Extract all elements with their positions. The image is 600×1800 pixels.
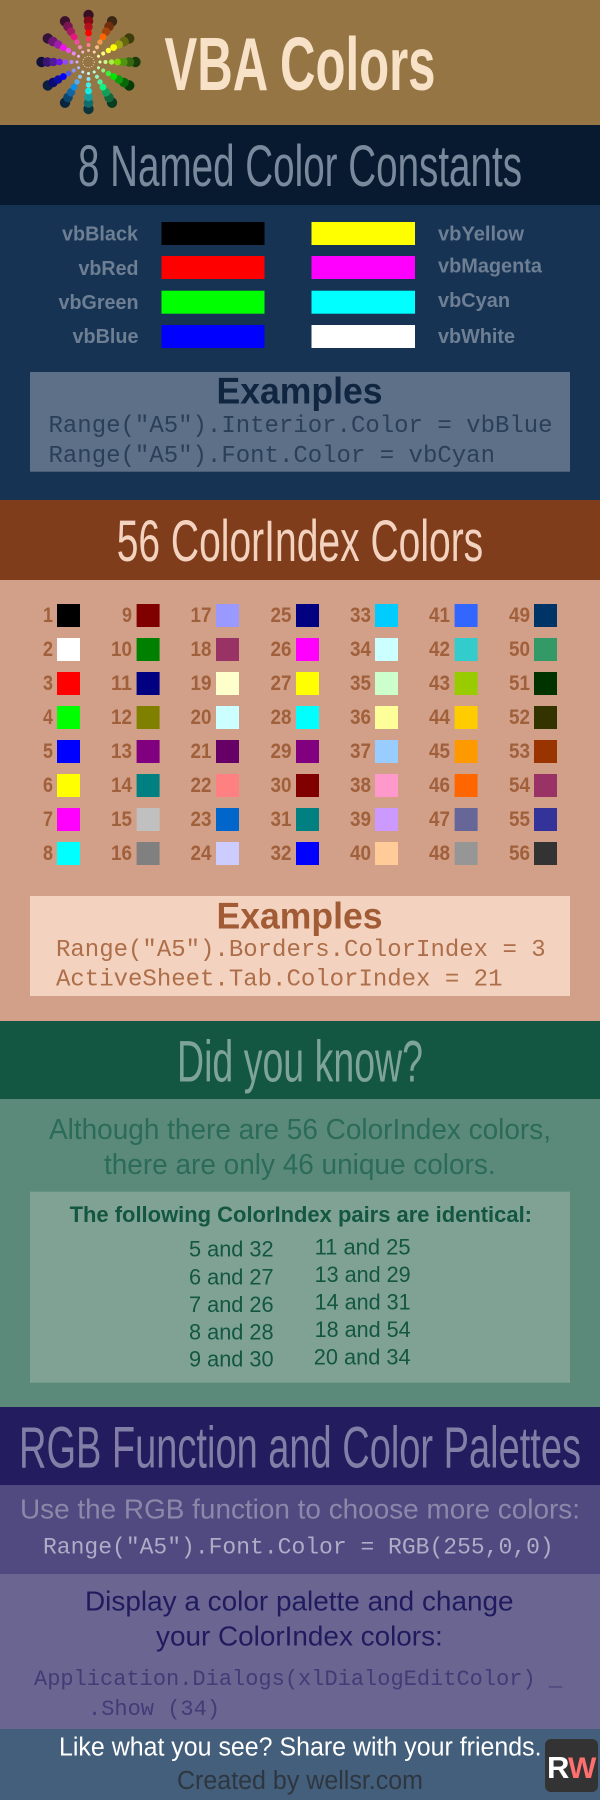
color grid column 6: 43: [429, 672, 450, 695]
color grid column 4: 32: [270, 842, 292, 865]
panel: ColorIndex colors: [0, 500, 600, 1021]
callout: identical pairs: [30, 1192, 570, 1383]
text: unique colors note: there are only 46 unique colors.: [104, 1149, 496, 1181]
right color constants: vbWhite: [438, 326, 515, 348]
color grid column 2: 16: [111, 842, 132, 865]
color grid column 7: 50: [509, 638, 530, 661]
right color constants: vbYellow: [438, 224, 524, 246]
color grid column 1: 3: [43, 672, 53, 695]
callout: identical pairs: 7 and 26: [189, 1292, 274, 1317]
text: color palette: Application.Dialogs(xlDialogEditColor) _: [34, 1667, 563, 1692]
left color constants: vbGreen: [58, 292, 138, 314]
icon: RW logo: R: [547, 1750, 569, 1785]
color grid column 7: 53: [509, 740, 530, 763]
color grid column 5: 34: [350, 638, 371, 661]
callout: examples: [30, 896, 570, 996]
color grid column 2: 10: [111, 638, 132, 661]
color grid column 5: 39: [350, 808, 371, 831]
color grid column 3: 19: [190, 672, 212, 695]
color grid column 7: 56: [509, 842, 530, 865]
color grid column 1: [43, 604, 80, 865]
right color constants: vbCyan: [438, 290, 510, 312]
callout: examples: Range("A5").Borders.ColorIndex = 3: [56, 937, 546, 964]
color grid column 4: 30: [270, 774, 292, 797]
color grid column 1: 1: [43, 604, 53, 627]
color grid column 6: [429, 604, 478, 865]
color grid column 2: 12: [111, 706, 132, 729]
color grid column 6: 42: [429, 638, 450, 661]
color grid column 3: 21: [190, 740, 212, 763]
icon: color wheel: [36, 10, 141, 114]
color grid column 2: 11: [111, 672, 132, 695]
color grid column 1: 6: [43, 774, 53, 797]
title: VBA Colors: [164, 22, 436, 106]
color grid column 4: 29: [270, 740, 292, 763]
callout: identical pairs: 18 and 54: [315, 1317, 411, 1342]
color grid column 3: [190, 604, 239, 865]
callout: examples: [30, 370, 570, 472]
color grid column 2: [111, 604, 160, 865]
callout: examples: ActiveSheet.Tab.ColorIndex = 21: [56, 967, 502, 994]
color grid column 4: 28: [270, 706, 292, 729]
callout: identical pairs: 8 and 28: [189, 1319, 274, 1344]
color grid column 4: 27: [270, 672, 292, 695]
text: color palette: [34, 1586, 563, 1722]
icon: RW logo: [545, 1739, 598, 1792]
color grid column 7: [509, 604, 557, 865]
color grid column 5: 36: [350, 706, 371, 729]
color grid column 5: 33: [350, 604, 371, 627]
color grid column 5: 35: [350, 672, 371, 695]
right color constants: vbMagenta: [438, 256, 543, 278]
color grid column 3: 23: [190, 808, 212, 831]
color grid column 6: 48: [429, 842, 450, 865]
color grid column 6: 46: [429, 774, 450, 797]
color grid column 2: 13: [111, 740, 132, 763]
color grid column 5: 37: [350, 740, 371, 763]
color grid column 1: 7: [43, 808, 53, 831]
color grid column 4: 31: [270, 808, 292, 831]
callout: examples: Range("A5").Font.Color = vbCyan: [48, 443, 495, 470]
text: credit: Created by wellsr.com: [177, 1767, 423, 1795]
color grid column 1: 2: [43, 638, 53, 661]
left color constants: vbBlue: [72, 326, 138, 348]
color grid column 3: 20: [190, 706, 212, 729]
text: RGB function: [20, 1493, 580, 1560]
callout: identical pairs: 13 and 29: [315, 1262, 411, 1287]
text: RGB function: Use the RGB function to choose more colors:: [20, 1493, 580, 1524]
color grid column 7: 49: [509, 604, 530, 627]
color grid column 4: [270, 604, 319, 865]
icon: RW logo: W: [568, 1752, 597, 1785]
left color constants: vbRed: [78, 258, 138, 280]
color grid column 2: 15: [111, 808, 132, 831]
left color constants: [58, 222, 264, 348]
callout: examples: Range("A5").Interior.Color = vbBlue: [48, 413, 553, 440]
panel: footer: [0, 1729, 600, 1800]
panel: named color constants: [0, 125, 600, 500]
text: RGB function: Range("A5").Font.Color = RGB(255,0,0): [43, 1534, 554, 1560]
callout: identical pairs: 5 and 32: [189, 1237, 274, 1262]
left color constants: vbBlack: [62, 224, 139, 246]
color grid column 1: 4: [43, 706, 53, 729]
heading: Did you know?: Did you know?: [177, 1030, 423, 1095]
panel: did you know: [0, 1021, 600, 1407]
color grid column 7: 51: [509, 672, 530, 695]
color grid column 2: 14: [111, 774, 132, 797]
color grid column 6: 41: [429, 604, 450, 627]
callout: identical pairs: 6 and 27: [189, 1264, 274, 1289]
color grid column 7: 54: [509, 774, 530, 797]
color grid column 6: 44: [429, 706, 450, 729]
color grid column 5: 38: [350, 774, 371, 797]
color grid column 4: 26: [270, 638, 292, 661]
color grid column 3: 22: [190, 774, 212, 797]
right color constants: [312, 222, 543, 348]
text: share line: Like what you see? Share with your friends.: [59, 1734, 542, 1762]
color grid column 5: [350, 604, 398, 865]
text: color palette: Display a color palette and change: [85, 1586, 514, 1617]
text: color palette: your ColorIndex colors:: [156, 1621, 443, 1652]
color grid column 6: 45: [429, 740, 450, 763]
color grid column 7: 55: [509, 808, 530, 831]
text: unique colors note: Although there are 56 ColorIndex colors,: [49, 1114, 551, 1146]
callout: examples: Examples: [216, 370, 382, 412]
callout: examples: Examples: [216, 896, 382, 936]
callout: identical pairs: 11 and 25: [315, 1235, 411, 1260]
callout: identical pairs: The following ColorIndex pairs are identical:: [70, 1202, 532, 1227]
color grid column 2: 9: [122, 604, 132, 627]
color grid column 5: 40: [350, 842, 371, 865]
color grid column 3: 17: [190, 604, 212, 627]
color grid column 1: 8: [43, 842, 53, 865]
callout: identical pairs: 20 and 34: [314, 1345, 411, 1370]
color grid column 4: 25: [270, 604, 292, 627]
panel: header: [0, 0, 600, 125]
callout: identical pairs: 14 and 31: [315, 1290, 411, 1315]
callout: identical pairs: 9 and 30: [189, 1347, 274, 1372]
color grid column 1: 5: [43, 740, 53, 763]
text: color palette: .Show (34): [88, 1697, 220, 1722]
color grid column 3: 24: [190, 842, 212, 865]
panel: RGB function and color palettes: [0, 1407, 600, 1729]
text: unique colors note: [49, 1114, 551, 1181]
color grid column 7: 52: [509, 706, 530, 729]
color grid column 3: 18: [190, 638, 212, 661]
color grid column 6: 47: [429, 808, 450, 831]
